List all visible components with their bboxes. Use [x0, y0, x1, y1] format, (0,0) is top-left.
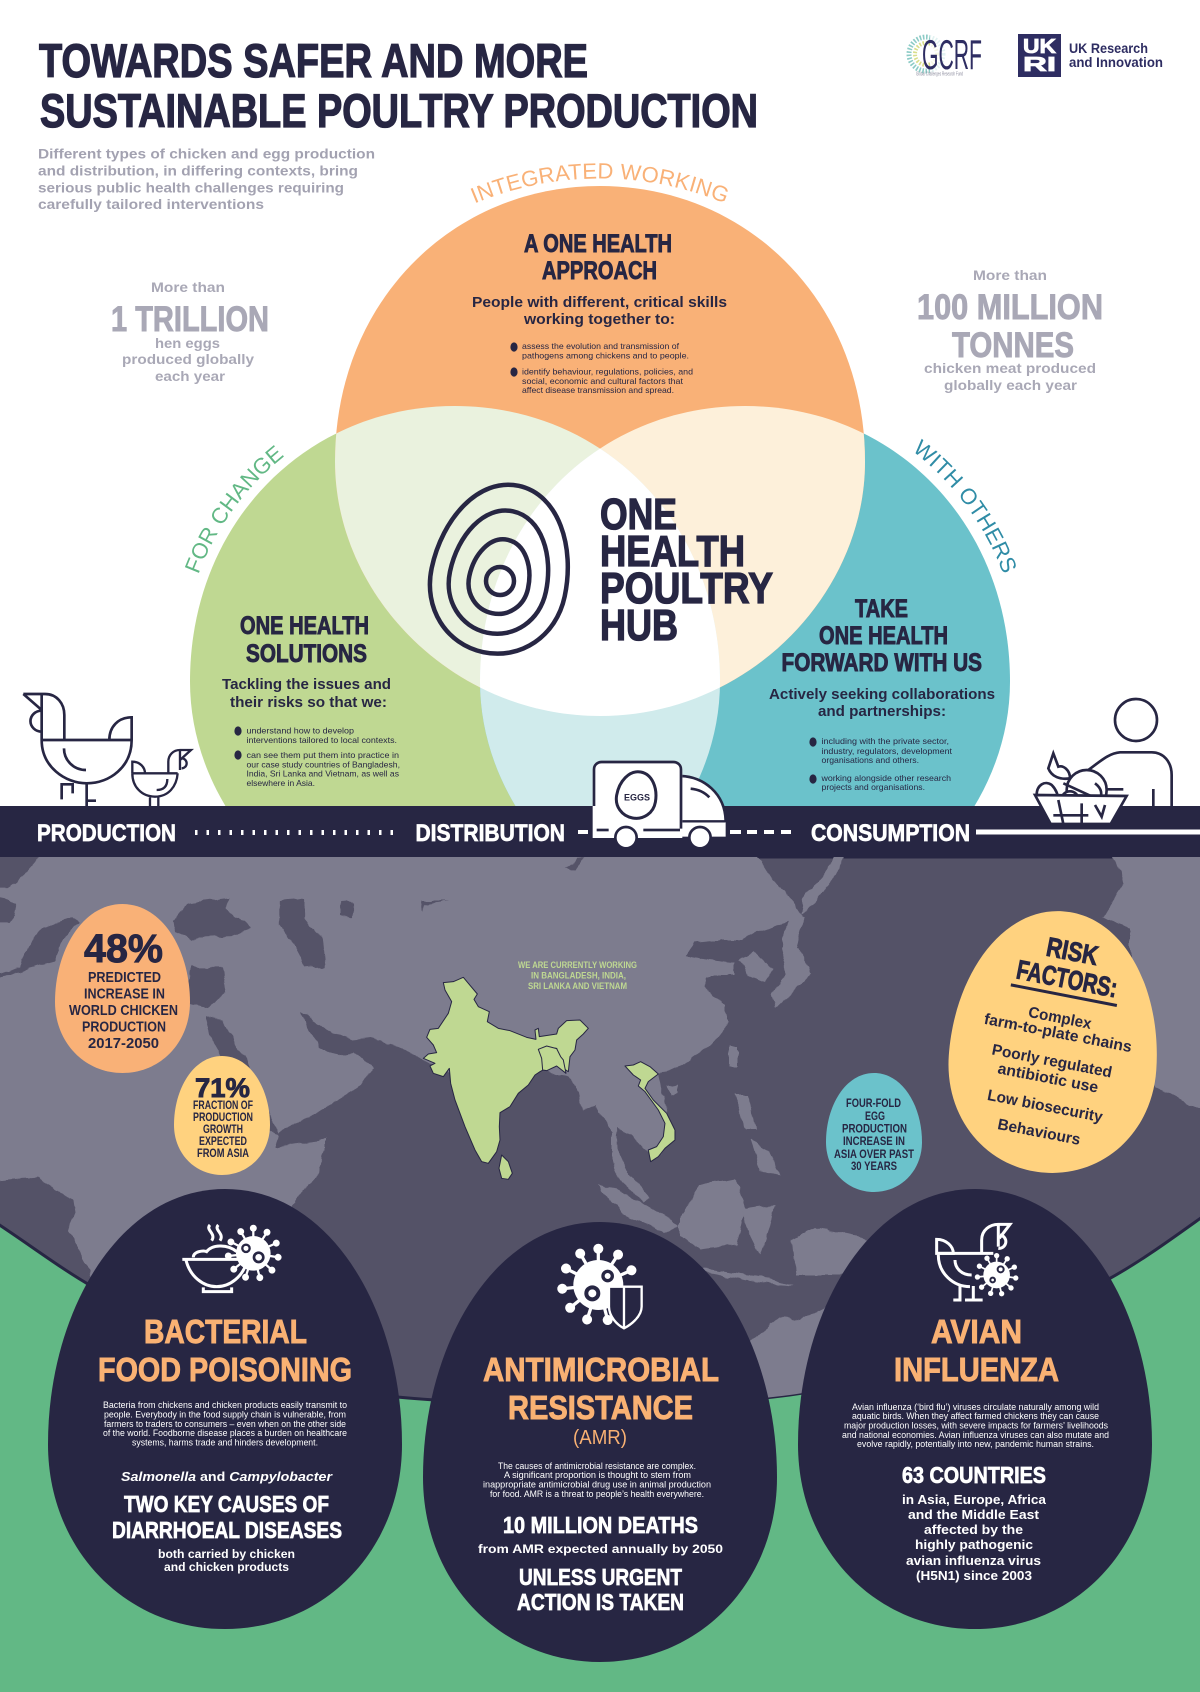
map land: Africa and Eurasia	[0, 857, 796, 1278]
panel: bacterial food poisoning: systems, harms trade and hinders development.	[132, 1438, 318, 1448]
hub name: HEALTH	[600, 527, 745, 576]
logo: UK Research and Innovation: UK Research	[1069, 40, 1148, 56]
stat egg: 48 percent: PRODUCTION	[82, 1020, 166, 1036]
logo: UK Research and Innovation	[1018, 34, 1163, 77]
panel: avian influenza: major production losses, with severe impacts for farmers’ livelihoods	[844, 1420, 1109, 1430]
map land: Korea, Japan, Kamchatka, North America	[738, 850, 1200, 1125]
panel: bacterial food poisoning: and chicken products	[164, 1560, 289, 1574]
panel: antimicrobial resistance: from AMR expected annually by 2050	[478, 1542, 723, 1556]
panel: avian influenza	[798, 1189, 1152, 1629]
title	[39, 34, 758, 137]
panel: antimicrobial resistance: The causes of antimicrobial resistance are complex.	[498, 1461, 696, 1471]
panel text: take one health forward with us: TAKE	[855, 595, 908, 623]
icon: person with food basket	[1035, 699, 1172, 824]
distribution dashes	[578, 830, 791, 834]
statistic: 100 million tonnes: TONNES	[952, 326, 1074, 365]
panel: antimicrobial resistance: ACTION IS TAKEN	[517, 1589, 684, 1615]
stat egg: four-fold egg production	[826, 1073, 922, 1192]
statistic: 1 trillion eggs: 1 TRILLION	[111, 300, 269, 339]
panel text: a one health approach: identify behaviour, regulations, policies, and	[522, 366, 693, 376]
green lower background	[0, 857, 1200, 1692]
hub name: ONE	[600, 490, 677, 539]
panel text: one health solutions: Tackling the issues and	[222, 677, 391, 693]
stat egg: 48 percent: INCREASE IN	[84, 986, 165, 1002]
hub name: POULTRY	[600, 564, 773, 613]
panel: avian influenza: INFLUENZA	[894, 1351, 1059, 1388]
logo: GCRF	[909, 30, 982, 78]
icon: big hen	[23, 694, 132, 806]
panel text: a one health approach: assess the evolution and transmission of	[522, 341, 680, 351]
panel: avian influenza: (H5N1) since 2003	[916, 1569, 1032, 1583]
panel text: take one health forward with us: FORWARD WITH US	[782, 649, 982, 677]
panel text: take one health forward with us: organisations and others.	[822, 755, 919, 765]
map land: islands of south-east Asia and Australia	[597, 1047, 880, 1410]
statistic: 1 trillion eggs: More than	[151, 280, 225, 295]
panel: bacterial food poisoning	[48, 1189, 402, 1629]
panel text: one health solutions: India, Sri Lanka and Vietnam, as well as	[246, 768, 399, 778]
panel text: one health solutions: can see them put them into practice in	[246, 750, 399, 760]
intro text	[38, 146, 375, 212]
map caption: SRI LANKA AND VIETNAM	[528, 981, 627, 992]
panel text: take one health forward with us: industry, regulators, development	[822, 746, 953, 756]
risk factors egg	[941, 904, 1167, 1180]
map: Bangladesh	[538, 1046, 566, 1073]
panel: avian influenza: evolve rapidly, potentially into new, pandemic human strains.	[857, 1439, 1094, 1449]
hub name	[600, 490, 773, 650]
risk factors egg: Poorly regulated	[990, 1042, 1113, 1081]
panel: antimicrobial resistance: inappropriate antimicrobial drug use in animal production	[483, 1480, 711, 1490]
panel: bacterial food poisoning: of the world. Foodborne disease places a burden on healthcare	[103, 1428, 347, 1438]
panel text: one health solutions: SOLUTIONS	[246, 640, 367, 668]
statistic: 1 trillion eggs	[111, 280, 269, 384]
risk factors egg: Low biosecurity	[986, 1087, 1104, 1126]
statistic: 100 million tonnes	[917, 268, 1103, 393]
road labels: PRODUCTION	[37, 820, 176, 847]
panel: avian influenza: and national economies. Avian influenza viruses can also mutate and	[842, 1430, 1109, 1440]
panel text: a one health approach: A ONE HEALTH	[524, 230, 672, 258]
statistic: 100 million tonnes: globally each year	[944, 378, 1078, 393]
map: Sri Lanka	[499, 1155, 512, 1179]
map: India	[423, 977, 588, 1163]
statistic: 100 million tonnes: chicken meat produced	[924, 361, 1096, 376]
road labels: DISTRIBUTION	[416, 820, 565, 847]
panel: avian influenza: and the Middle East	[908, 1508, 1040, 1522]
road band	[0, 806, 1200, 857]
stat egg: four-fold egg production: INCREASE IN	[843, 1136, 905, 1148]
icon: bowl with bacteria	[182, 1225, 282, 1292]
panel: bacterial food poisoning: Salmonella and Campylobacter	[121, 1470, 333, 1484]
panel: bacterial food poisoning: TWO KEY CAUSES OF	[124, 1491, 329, 1517]
panel: antimicrobial resistance	[423, 1222, 777, 1662]
panel: antimicrobial resistance: 10 MILLION DEATHS	[503, 1512, 698, 1538]
panel text: take one health forward with us	[769, 595, 995, 792]
panel: bacterial food poisoning: DIARRHOEAL DISEASES	[112, 1517, 342, 1543]
risk factors egg: Complex	[1027, 1004, 1093, 1033]
stat egg: 71 percent	[174, 1056, 270, 1175]
panel: avian influenza: affected by the	[924, 1523, 1023, 1537]
panel: antimicrobial resistance: for food. AMR is a threat to people’s health everywhere.	[490, 1489, 704, 1499]
panel text: one health solutions: their risks so that we:	[230, 695, 387, 711]
logo: one health poultry hub egg rings	[417, 472, 585, 666]
arc label: integrated working: INTEGRATED WORKING	[470, 163, 728, 203]
stat egg: 71 percent: FRACTION OF	[193, 1100, 253, 1112]
venn diagram of three eggs	[190, 186, 1010, 806]
logo: UK Research and Innovation: and Innovation	[1069, 54, 1163, 70]
panel text: a one health approach: APPROACH	[542, 257, 657, 285]
panel: avian influenza: AVIAN	[931, 1313, 1022, 1350]
panel: antimicrobial resistance: UNLESS URGENT	[519, 1564, 682, 1590]
map: Vietnam	[625, 1062, 675, 1162]
panel text: take one health forward with us: ONE HEALTH	[819, 622, 948, 650]
icon: small hen	[132, 750, 191, 806]
intro text: and distribution, in differing contexts, bring	[38, 164, 358, 178]
statistic: 100 million tonnes: More than	[973, 268, 1047, 283]
dotted production road line	[195, 830, 401, 835]
statistic: 1 trillion eggs: produced globally	[122, 352, 255, 367]
panel: antimicrobial resistance: (AMR)	[573, 1427, 627, 1449]
stat egg: four-fold egg production: EGG	[865, 1111, 885, 1123]
panel: avian influenza: avian influenza virus	[906, 1554, 1041, 1568]
title: TOWARDS SAFER AND MORE	[39, 34, 588, 87]
icon: egg delivery truck: EGGS	[624, 793, 650, 803]
stat egg: four-fold egg production: FOUR-FOLD	[846, 1098, 901, 1110]
panel: antimicrobial resistance: A significant proportion is thought to stem from	[504, 1470, 691, 1480]
logo: GCRF: GCRF	[922, 31, 982, 78]
statistic: 100 million tonnes: 100 MILLION	[917, 288, 1103, 327]
world map panel	[0, 850, 1200, 1410]
risk factors egg: RISK	[1044, 932, 1101, 971]
panel text: take one health forward with us: projects and organisations.	[822, 782, 925, 792]
stat egg: 71 percent: 71%	[195, 1073, 250, 1103]
hub name: HUB	[600, 601, 678, 650]
logo: GCRF: Global Challenges Research Fund	[916, 72, 963, 78]
logo: UK Research and Innovation: RI	[1023, 54, 1056, 76]
risk factors egg: FACTORS:	[1014, 955, 1120, 1003]
logo: UK Research and Innovation: UK	[1023, 36, 1057, 58]
stat egg: 71 percent: GROWTH	[203, 1124, 243, 1136]
icon: egg delivery truck	[594, 762, 726, 848]
consumption solid line	[976, 830, 1200, 834]
panel text: take one health forward with us: including with the private sector,	[822, 736, 949, 746]
panel: bacterial food poisoning: farmers to traders to consumers – even when on the other side	[104, 1419, 346, 1429]
risk factors egg: farm-to-plate chains	[983, 1011, 1133, 1056]
statistic: 1 trillion eggs: hen eggs	[155, 336, 220, 351]
panel: avian influenza: in Asia, Europe, Africa	[902, 1493, 1047, 1507]
risk factors egg: antibiotic use	[996, 1060, 1100, 1097]
stat egg: 48 percent: 2017-2050	[88, 1036, 159, 1052]
title: SUSTAINABLE POULTRY PRODUCTION	[40, 84, 758, 137]
panel text: one health solutions: elsewhere in Asia.	[246, 778, 315, 788]
stat egg: 48 percent	[55, 904, 190, 1073]
panel: bacterial food poisoning: both carried by chicken	[158, 1547, 295, 1561]
panel: avian influenza: aquatic birds. When they affect farmed chickens they can cause	[852, 1411, 1099, 1421]
stat egg: 48 percent: 48%	[84, 927, 163, 971]
panel: antimicrobial resistance: ANTIMICROBIAL	[483, 1351, 719, 1388]
road labels: CONSUMPTION	[811, 820, 970, 847]
panel text: take one health forward with us: and partnerships:	[818, 704, 946, 720]
panel text: a one health approach: pathogens among chickens and to people.	[522, 350, 689, 360]
panel: antimicrobial resistance: RESISTANCE	[508, 1389, 693, 1426]
panel text: a one health approach: affect disease transmission and spread.	[522, 385, 674, 395]
map seas	[0, 850, 585, 1137]
panel text: one health solutions	[222, 612, 400, 788]
intro text: serious public health challenges requiring	[38, 180, 344, 196]
panel text: one health solutions: our case study countries of Bangladesh,	[246, 760, 400, 770]
panel text: take one health forward with us: Actively seeking collaborations	[769, 687, 995, 703]
icon: microbe and shield	[557, 1244, 642, 1328]
stat egg: 71 percent: PRODUCTION	[193, 1112, 253, 1124]
panel: bacterial food poisoning: BACTERIAL	[144, 1313, 307, 1350]
stat egg: 71 percent: FROM ASIA	[197, 1148, 249, 1160]
stat egg: four-fold egg production: 30 YEARS	[851, 1161, 897, 1173]
map: focus countries	[423, 977, 675, 1179]
icon: hen with virus	[937, 1224, 1019, 1300]
stat egg: 48 percent: PREDICTED	[88, 970, 161, 986]
panel text: a one health approach	[472, 230, 727, 395]
map caption: WE ARE CURRENTLY WORKING	[518, 960, 637, 971]
panel: bacterial food poisoning: people. Everybody in the food supply chain is vulnerable, from	[104, 1410, 346, 1420]
panel text: take one health forward with us: working alongside other research	[820, 773, 951, 783]
panel text: a one health approach: social, economic and cultural factors that	[522, 376, 684, 386]
panel text: one health solutions: understand how to develop	[246, 726, 354, 736]
panel: bacterial food poisoning: FOOD POISONING	[98, 1351, 352, 1388]
intro text: Different types of chicken and egg production	[38, 146, 375, 162]
panel text: a one health approach: working together to:	[523, 312, 675, 328]
road labels	[37, 820, 970, 847]
statistic: 1 trillion eggs: each year	[155, 369, 226, 384]
panel: avian influenza: Avian influenza (‘bird flu’) viruses circulate naturally among wild	[852, 1402, 1099, 1412]
stat egg: four-fold egg production: ASIA OVER PAST	[834, 1149, 914, 1161]
map caption	[518, 960, 637, 992]
arc label: with others: WITH OTHERS	[916, 438, 1016, 572]
panel: bacterial food poisoning: Bacteria from chickens and chicken products easily transmit to	[103, 1400, 347, 1410]
intro text: carefully tailored interventions	[38, 197, 264, 212]
risk factors egg: Behaviours	[996, 1116, 1082, 1149]
stat egg: 48 percent: WORLD CHICKEN	[69, 1003, 178, 1019]
stat egg: 71 percent: EXPECTED	[199, 1136, 247, 1148]
panel text: one health solutions: ONE HEALTH	[240, 612, 369, 640]
arc label: for change: FOR CHANGE	[184, 445, 284, 573]
stat egg: four-fold egg production: PRODUCTION	[842, 1124, 907, 1136]
panel: avian influenza: highly pathogenic	[915, 1538, 1033, 1552]
panel: avian influenza: 63 COUNTRIES	[902, 1462, 1046, 1488]
panel text: one health solutions: interventions tailored to local contexts.	[246, 735, 397, 745]
panel text: a one health approach: People with different, critical skills	[472, 295, 727, 311]
map caption: IN BANGLADESH, INDIA,	[531, 970, 626, 982]
